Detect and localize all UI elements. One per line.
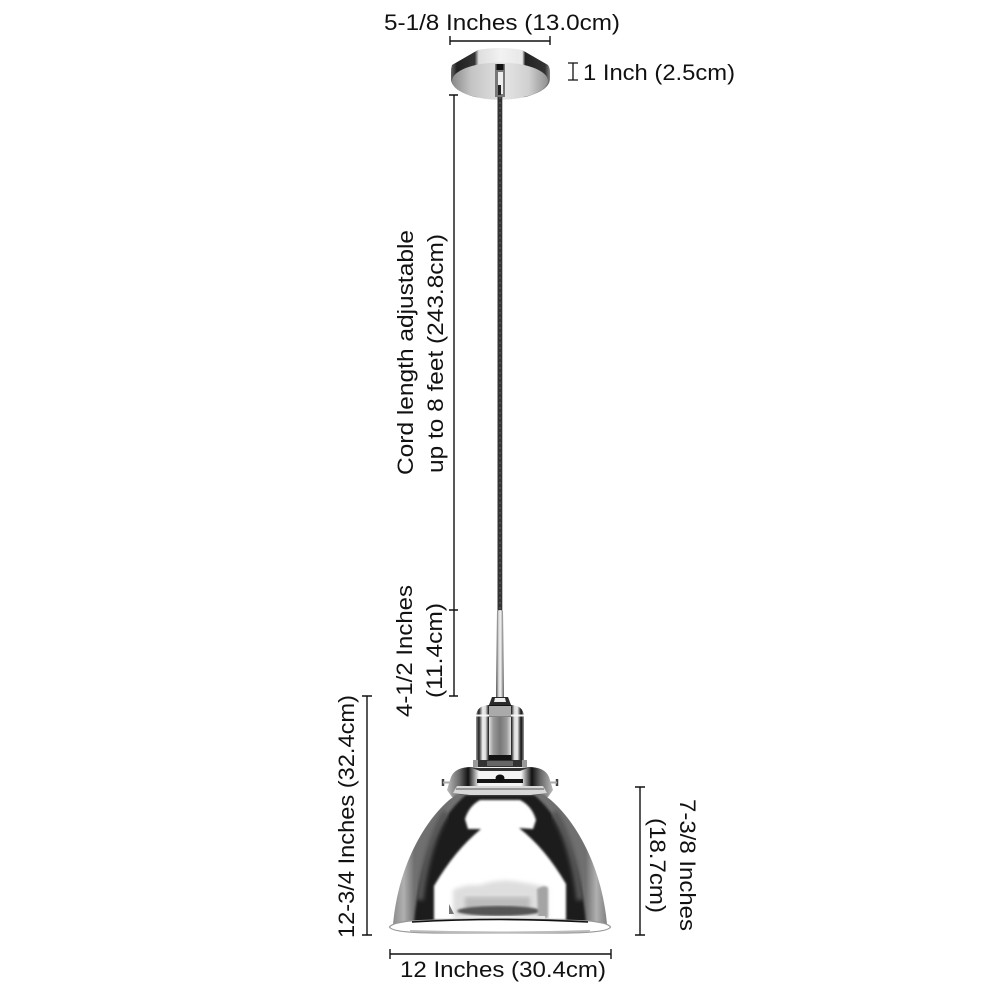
icon: height bracket [568, 63, 578, 80]
shade [390, 795, 610, 933]
lamp: pendant fixture [390, 610, 610, 933]
label: shade width: 12 Inches (30.4cm) [400, 957, 606, 982]
label: rod length: (11.4cm) [422, 603, 447, 698]
label: canopy width: 5-1/8 Inches (13.0cm) [384, 10, 620, 35]
dimension line: total height [362, 696, 372, 935]
dimension line: shade height [635, 787, 645, 935]
dimension line: shade width [390, 949, 611, 959]
rod [496, 610, 504, 697]
cord [498, 97, 502, 611]
label: rod length [392, 585, 447, 717]
dimension line: cord and rod [449, 95, 458, 696]
label: rod length: 4-1/2 Inches [392, 585, 417, 717]
label: shade height: 7-3/8 Inches [675, 799, 700, 931]
label: total height: 12-3/4 Inches (32.4cm) [334, 695, 359, 938]
label: cord length: Cord length adjustable [393, 230, 418, 475]
rim [390, 919, 610, 933]
socket [473, 697, 527, 767]
icon: ceiling canopy [451, 48, 550, 100]
label: shade height [645, 799, 700, 931]
collar [443, 767, 557, 797]
dimension line: canopy width [450, 36, 550, 45]
label: cord length: up to 8 feet (243.8cm) [423, 234, 448, 473]
label: canopy height: 1 Inch (2.5cm) [583, 60, 735, 85]
label: shade height: (18.7cm) [645, 818, 670, 913]
label: cord length [393, 230, 448, 475]
